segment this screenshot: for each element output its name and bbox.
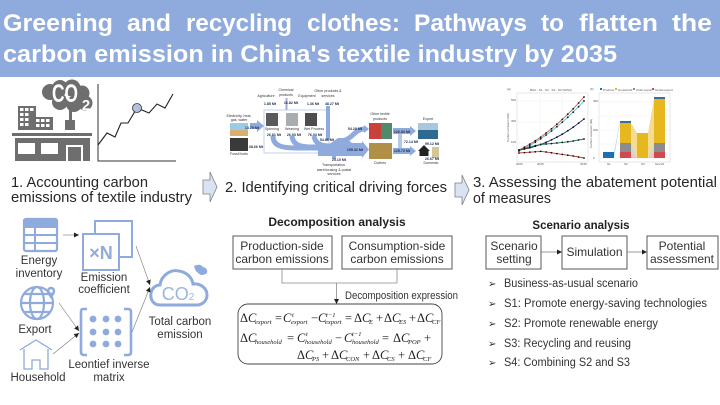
sankey labels: 126.83 Mt [394, 130, 411, 134]
sankey labels: Fossil fuels [230, 152, 248, 156]
equation: household: ΔC [297, 348, 314, 362]
equation: export: C [318, 311, 327, 325]
box: consumption-side: carbon emissions [350, 252, 444, 266]
equation: export: + [409, 311, 416, 325]
equation: export: = [345, 311, 352, 325]
heading: step 2: 2. Identifying critical driving forces [225, 179, 447, 196]
scenario list: S4: Combining S2 and S3 [504, 357, 630, 369]
scenario list: ➢ [488, 358, 496, 369]
equation: export: CF [432, 319, 441, 326]
heading: step 3: 3. Assessing the abatement potential [473, 174, 717, 191]
panel: accounting inputs [11, 219, 211, 384]
label: emission coefficient: coefficient [78, 284, 131, 296]
line chart: emissions by scenario: 300 [511, 119, 516, 123]
icon: emission coefficient: ×N [89, 243, 113, 263]
line chart: emissions by scenario: BAU · S1 · S2 · S3 · S4 (S2S3) [530, 88, 572, 92]
scenario list: S1: Promote energy-saving technologies [504, 298, 707, 310]
equation: household: CF [423, 356, 432, 363]
icon: household [20, 340, 52, 369]
stacked bar chart: reduction by sector: 200 [593, 128, 598, 132]
icon: factory with CO2 cloud: 2 [82, 97, 90, 114]
sankey labels: 26.53 Mt [287, 133, 302, 137]
box: potential assessment: assessment [650, 252, 715, 266]
heading: step 1: emissions of textile industry [11, 190, 193, 206]
equation: household: t [306, 331, 308, 338]
equation: household: ΔC [393, 331, 410, 345]
equation: export: ES [398, 319, 407, 326]
equation: household: C [297, 331, 306, 345]
line chart: emissions by scenario: 100 [511, 140, 516, 144]
equation: household: = [382, 331, 389, 345]
icon: factory with CO2 cloud [12, 80, 92, 161]
equation: household: household [305, 339, 332, 346]
connecting bands [614, 121, 620, 158]
line chart: emissions by scenario: 500 [511, 98, 516, 102]
sankey labels: Chemical [279, 88, 294, 92]
sankey labels: 72.14 Mt [404, 140, 419, 144]
equation: household: CON [346, 356, 360, 363]
equation: export [240, 311, 441, 326]
equation: export: C [283, 311, 292, 325]
equation: export: ΔC [354, 311, 371, 325]
label: total carbon emission: emission [157, 329, 203, 341]
label: export: Export [18, 324, 52, 336]
scenario list: S2: Promote renewable energy [504, 318, 658, 330]
sankey labels: 1.85 Mt [264, 102, 277, 106]
line chart: emissions by scenario: (a) [507, 87, 511, 91]
title banner: Greening [3, 10, 113, 37]
label: emission coefficient: Emission [81, 272, 127, 284]
panel: scenario analysis [486, 220, 718, 369]
scenario list: ➢ [488, 299, 496, 310]
stacked bar chart: reduction by sector: 400 [593, 99, 598, 103]
box: production-side: Production-side [240, 239, 324, 253]
line chart: emissions by scenario: 2035 [580, 162, 587, 166]
sankey labels: Wet Process [304, 127, 324, 131]
equation: household: household [352, 339, 379, 346]
sankey labels: services [321, 94, 335, 98]
panel: decomposition analysis [233, 215, 458, 364]
sankey labels: 48.27 Mt [325, 102, 340, 106]
heading: step 1: 1. Accounting carbon [11, 175, 148, 191]
icon: Leontief matrix [81, 309, 131, 355]
heading: scenario analysis: Scenario analysis [532, 220, 630, 232]
title banner: to [541, 10, 564, 37]
equation: household: − [335, 331, 342, 345]
title banner [0, 0, 720, 77]
connector to expression [282, 269, 397, 304]
sankey labels: 26.67 Mt [425, 157, 440, 161]
sankey labels [226, 88, 440, 176]
icon: energy inventory table [24, 219, 57, 251]
stacked bar chart: reduction by sector: 0 [593, 156, 595, 160]
sankey labels: 13.79 Mt [245, 126, 260, 130]
icon: CO2 cloud [151, 265, 207, 305]
stacked bar chart: reduction by sector: Cloth-export [636, 88, 653, 92]
sankey labels: Clothes [374, 161, 386, 165]
icon: factory with CO2 cloud: CO [52, 80, 78, 108]
equation: export: + [376, 311, 383, 325]
sankey labels: Weaving [285, 127, 299, 131]
sankey labels: 54.28 Mt [348, 127, 363, 131]
label: energy inventory: Energy [21, 255, 57, 267]
equation: household: PS [311, 356, 320, 363]
sankey labels: 99.12 Mt [425, 142, 440, 146]
box: potential assessment [647, 236, 718, 269]
flows [250, 98, 410, 159]
sankey labels: Electricity, heat, [226, 114, 252, 118]
frame [264, 110, 329, 153]
title banner: flatten [579, 10, 658, 37]
process images [230, 113, 439, 159]
sankey labels: 38.66 Mt [249, 145, 264, 149]
box: scenario setting: setting [496, 252, 532, 266]
icon: export globe [21, 287, 55, 319]
equation: household: ΔC [240, 331, 257, 345]
equation: household [240, 331, 432, 363]
label: Leontief inverse matrix: matrix [93, 372, 125, 384]
equation: household: + [398, 348, 405, 362]
box: consumption-side [342, 236, 452, 269]
equation: export: E [368, 319, 373, 326]
equation: export: ΔC [240, 311, 257, 325]
box: potential assessment: Potential [659, 239, 705, 253]
sankey labels: products [373, 117, 387, 121]
box: consumption-side: Consumption-side [349, 239, 446, 253]
sankey labels: 76.03 Mt [308, 133, 323, 137]
sankey labels: Agriculture [257, 94, 275, 98]
equation: export: t [292, 312, 294, 319]
equation: export: export [255, 319, 272, 326]
title banner: clothes: [307, 10, 400, 37]
icon: CO2 cloud: CO2 [162, 284, 195, 304]
line chart: emissions by scenario: 2020 [516, 162, 523, 166]
label: decomposition expression: Decomposition expression [345, 290, 458, 302]
label: energy inventory: inventory [16, 268, 63, 280]
arrow: step 2 to step 3 [455, 175, 469, 205]
equation: household: + [322, 348, 329, 362]
heading: step 1 [11, 175, 193, 206]
equation: household: POP [407, 339, 421, 346]
heading: step 3: of measures [473, 190, 551, 207]
stacked bar chart: reduction by sector: (b) [590, 87, 594, 91]
sankey labels: gas, water [231, 118, 248, 122]
stacked bar chart: reduction by sector [589, 87, 673, 166]
equation: household: t−1 [352, 331, 361, 338]
sankey labels: 16.82 Mt [284, 101, 299, 105]
equation: household: ΔC [331, 348, 348, 362]
sankey labels: products [279, 93, 293, 97]
sankey labels: services [327, 172, 341, 176]
sankey flow diagram [226, 88, 440, 176]
sankey labels: Spinning [265, 127, 279, 131]
box: production-side [233, 236, 332, 269]
icon: emission coefficient [83, 221, 132, 270]
equation: export: = [275, 311, 282, 325]
equation: household: C [344, 331, 353, 345]
scenario list: ➢ [488, 339, 496, 350]
sankey labels: 25.10 Mt [332, 158, 347, 162]
title banner: and [127, 10, 171, 37]
heading: step 3 [473, 174, 717, 207]
line chart icon [98, 84, 176, 161]
title banner: carbon emission in China's textile industry by 2035 [3, 41, 617, 68]
equation: household: ΔC [408, 348, 425, 362]
equation: export: ΔC [417, 311, 434, 325]
box: simulation: Simulation [566, 245, 623, 259]
expression box [238, 304, 442, 364]
equation: export: ΔC [384, 311, 401, 325]
equation: household: + [363, 348, 370, 362]
equation: export: export [291, 319, 308, 326]
stacked bar chart: reduction by sector: S2 [624, 162, 628, 166]
arrows between boxes [541, 251, 647, 253]
equation: household: ΔC [372, 348, 389, 362]
equation: household: = [287, 331, 294, 345]
scenario list: S3: Recycling and reusing [504, 338, 631, 350]
equation: export: − [311, 311, 318, 325]
sankey labels: 125.73 Mt [394, 149, 411, 153]
box: scenario setting: Scenario [490, 239, 538, 253]
label: household: Household [11, 372, 65, 384]
sankey labels: 54.86 Mt [320, 138, 335, 142]
line chart: emissions by scenario: Carbon emission (Mt) [506, 113, 510, 142]
equation: household: household [255, 339, 282, 346]
sankey labels: Export [423, 117, 433, 121]
sankey labels: Equipment [298, 94, 316, 98]
line chart: emissions by scenario [506, 87, 588, 166]
stacked bar chart: reduction by sector: S3 [641, 162, 645, 166]
title banner: recycling [186, 10, 292, 37]
scenario list: Business-as-usual scenario [504, 278, 638, 290]
stacked bar chart: reduction by sector: Produce [603, 88, 615, 92]
scenario list [488, 278, 707, 369]
sankey labels: Transportation, [322, 163, 346, 167]
arrow: step 1 to step 2 [203, 172, 217, 202]
equation: household: + [424, 331, 431, 345]
sankey labels: 26.81 Mt [267, 133, 282, 137]
stacked bar chart: reduction by sector: S1 [607, 162, 611, 166]
sankey labels: 1.36 Mt [307, 102, 320, 106]
label: total carbon emission: Total carbon [149, 316, 211, 328]
equation: export: t−1 [326, 312, 335, 319]
stacked bar chart: reduction by sector: Textile-export [655, 88, 673, 92]
sankey labels: Domestic [424, 161, 439, 165]
line chart: emissions by scenario: 2025 [537, 162, 544, 166]
label: Leontief inverse matrix: Leontief inverse [68, 359, 150, 371]
scenario list: ➢ [488, 279, 496, 290]
title banner: the [672, 10, 712, 37]
box: simulation [562, 236, 627, 269]
sankey labels: Other products & [314, 89, 342, 93]
box: scenario setting [486, 236, 541, 269]
sankey labels: 195.32 Mt [347, 148, 364, 152]
scenario list: ➢ [488, 319, 496, 330]
heading: decomposition analysis: Decomposition analysis [268, 215, 406, 229]
equation: household: CS [387, 356, 395, 363]
box: production-side: carbon emissions [235, 252, 329, 266]
stacked bar chart: reduction by sector: S2+S3 [655, 162, 664, 166]
stacked bar chart: reduction by sector: Household [618, 88, 633, 92]
sankey labels: Other textile [370, 112, 390, 116]
equation: export: export [325, 319, 342, 326]
stacked bar chart: reduction by sector: Carbon reduction (Mt) [589, 119, 593, 148]
arrows: inputs to emission [53, 235, 150, 354]
title banner: Pathways [414, 10, 527, 37]
sankey labels: warehousing & postal [317, 168, 351, 172]
